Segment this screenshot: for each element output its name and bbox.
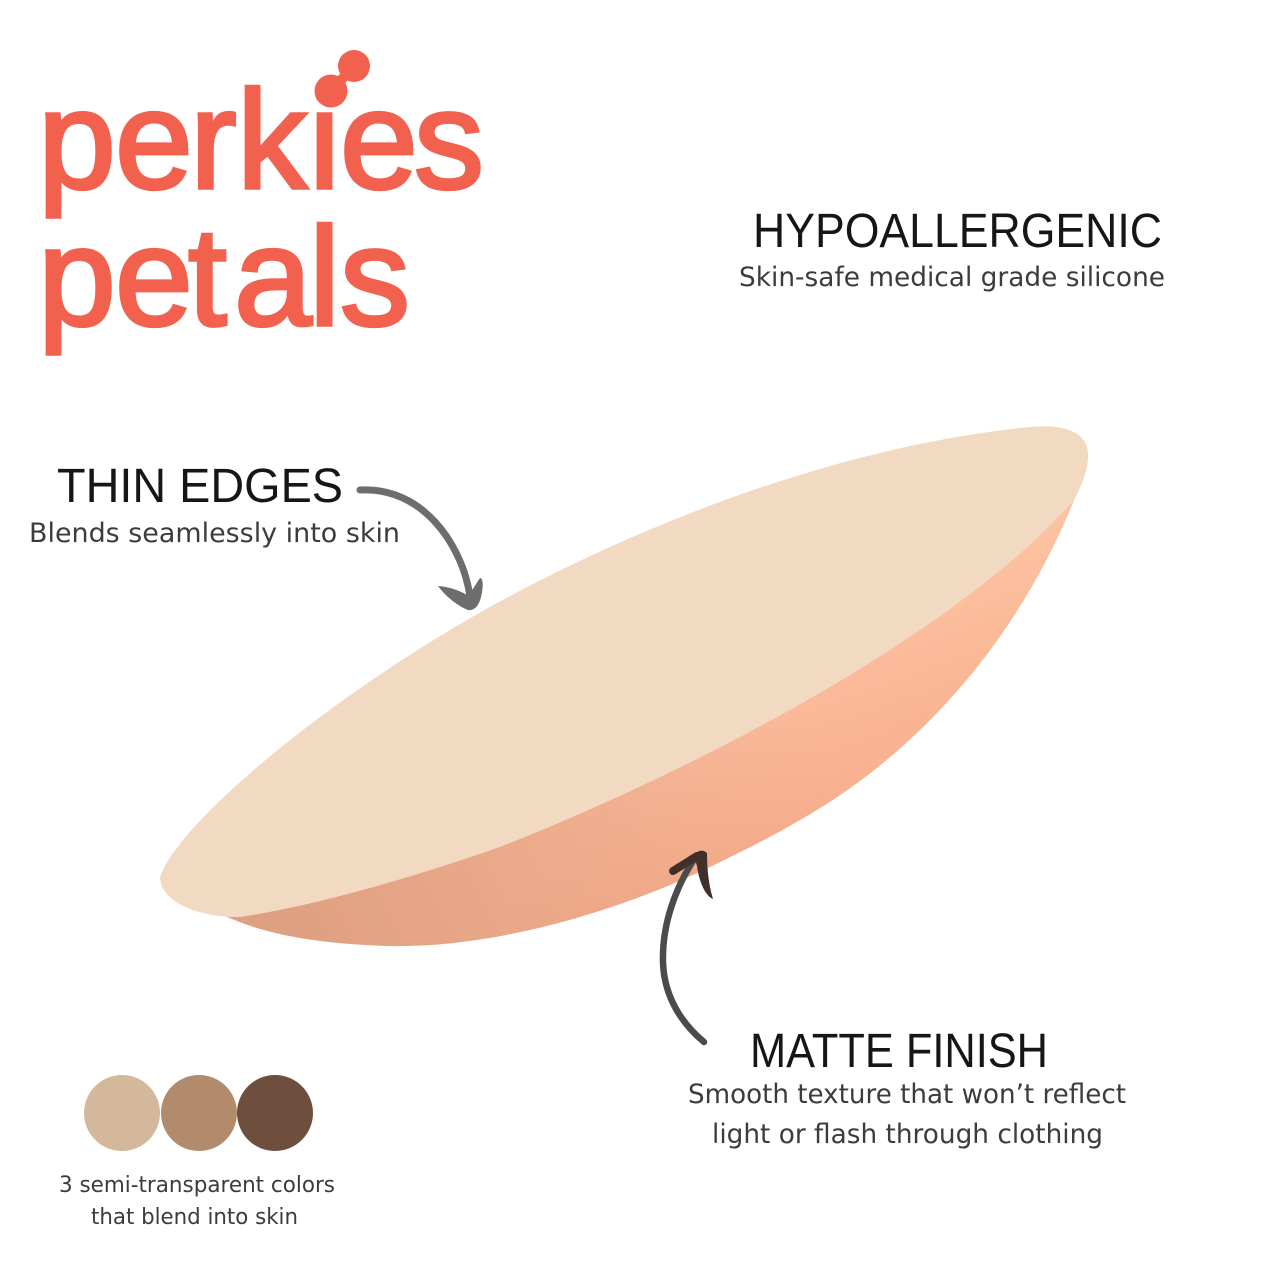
text: light or flash: light or flash through clothing <box>712 1119 1103 1150</box>
logo icon: two joined dots <box>314 50 370 108</box>
logo: perkies petals <box>38 50 484 355</box>
callout: matte finish <box>688 1025 1126 1150</box>
swatch: dark <box>237 1075 313 1151</box>
heading: hypoallergenic: HYPOALLERGENIC <box>753 205 1162 258</box>
heading: thin edges: THIN EDGES <box>57 460 343 513</box>
arrow: to thin edge <box>360 490 483 610</box>
illustration: silicone petal <box>160 426 1088 946</box>
caption: colors: 3 semi-transparent colors <box>59 1173 335 1198</box>
petal underside <box>223 500 1074 946</box>
petal top surface <box>160 426 1088 917</box>
logo word: petals: petals <box>38 198 410 355</box>
heading: matte finish: MATTE FINISH <box>750 1025 1048 1078</box>
arrow: to matte underside <box>663 851 713 1042</box>
callout: thin edges <box>29 460 400 549</box>
swatch: light <box>84 1075 160 1151</box>
color swatches <box>84 1075 313 1151</box>
text: skin-safe silicone: Skin-safe medical grade silicone <box>739 262 1165 293</box>
text: smooth texture: Smooth texture that won’t reflect <box>688 1079 1126 1110</box>
caption: colors <box>59 1173 335 1230</box>
text: blends into skin: Blends seamlessly into skin <box>29 518 400 549</box>
caption: colors: that blend into skin <box>91 1205 298 1230</box>
swatch: medium <box>161 1075 237 1151</box>
logo word: perkies: perkies <box>38 61 484 218</box>
callout: hypoallergenic <box>739 205 1165 293</box>
